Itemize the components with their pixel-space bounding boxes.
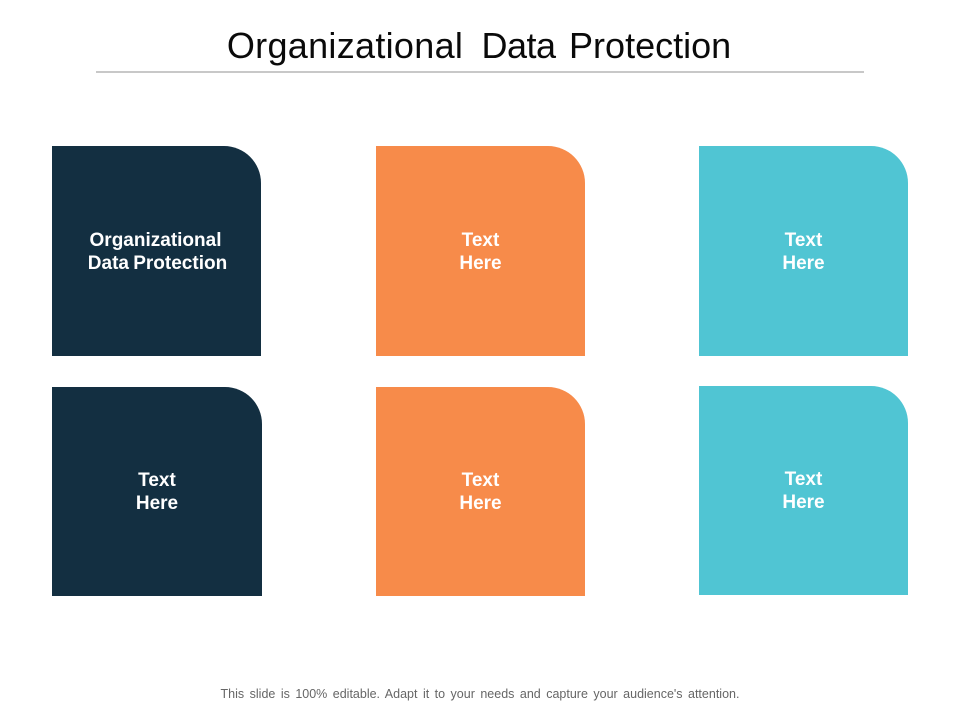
panel: orange top (376, 146, 585, 356)
panel: orange bottom (376, 387, 585, 596)
panel: orange bottom: Text Here (459, 470, 502, 514)
panel: teal bottom (699, 386, 908, 595)
panel: navy top (52, 146, 261, 356)
title underline (96, 71, 864, 73)
panel: navy bottom: Text Here (136, 470, 178, 514)
panel: orange top: Text Here (459, 230, 502, 274)
panel: navy bottom (52, 387, 262, 596)
panel: navy top: Organizational (90, 230, 221, 251)
panel: teal bottom: Text Here (782, 469, 825, 513)
panel: navy top: Data Protection (88, 253, 227, 274)
footer text: This slide is 100% editable. Adapt it to your needs and capture your audience's attention. (221, 687, 739, 701)
panel: teal top: Text Here (782, 230, 825, 274)
panel: teal top (699, 146, 908, 356)
title: Organizational Data Protection (227, 25, 731, 66)
